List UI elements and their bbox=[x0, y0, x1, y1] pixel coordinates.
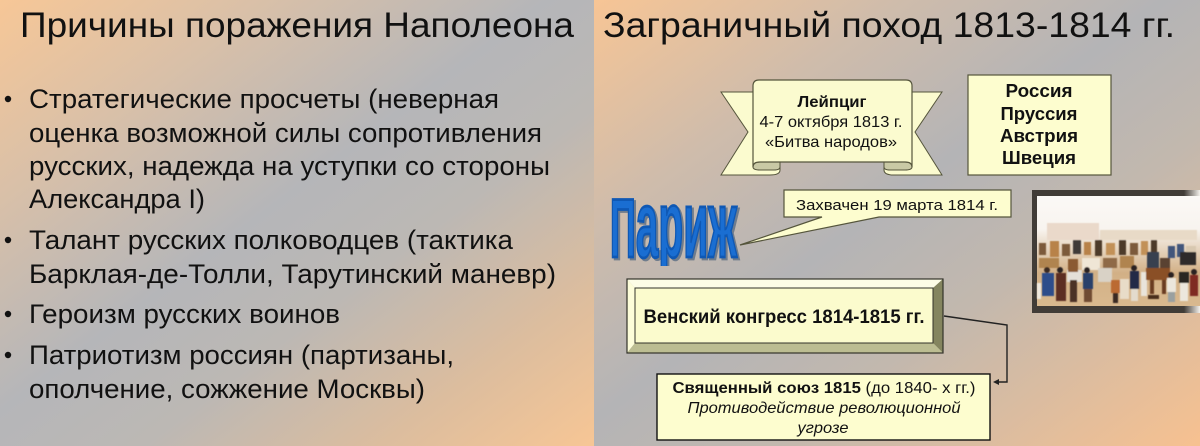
box: Holy Alliance bbox=[657, 374, 990, 440]
banner: Leipzig bbox=[721, 80, 942, 175]
panel: right background bbox=[594, 0, 1200, 446]
panel: left background bbox=[0, 0, 594, 446]
box: Congress of Vienna: Венский конгресс 1814-1815 гг. bbox=[644, 307, 924, 328]
wordart: Paris: Париж bbox=[612, 174, 740, 279]
box: Congress of Vienna bbox=[627, 279, 943, 353]
bullet item: patriotism: ополчение, сожжение Москвы) bbox=[29, 374, 425, 404]
bullet item: strategic miscalculations: Стратегические просчеты (неверная bbox=[29, 84, 499, 114]
banner: Leipzig: «Битва народов» bbox=[765, 134, 897, 151]
bullet item: strategic miscalculations: оценка возможной силы сопротивления bbox=[29, 118, 542, 148]
box: Holy Alliance: угрозе bbox=[796, 420, 849, 437]
wordart: Paris bbox=[612, 198, 740, 266]
image: entry of allied troops into Paris bbox=[1032, 190, 1200, 313]
bullet item: heroism: Героизм русских воинов bbox=[29, 299, 340, 329]
bullet item: patriotism: Патриотизм россиян (партизаны, bbox=[29, 340, 454, 370]
callout: captured March 19 1814: Захвачен 19 марта 1814 г. bbox=[796, 197, 998, 214]
box: allied countries: Австрия bbox=[1000, 126, 1078, 146]
bullet item: talent of commanders bbox=[5, 225, 556, 289]
bullet item: talent of commanders: Талант русских полководцев (тактика bbox=[29, 225, 514, 255]
title: foreign campaign: Заграничный поход 1813-1814 гг. bbox=[603, 6, 1175, 45]
callout: captured March 19 1814 bbox=[740, 190, 1011, 245]
bullet item: patriotism bbox=[5, 340, 454, 404]
banner: Leipzig: 4-7 октября 1813 г. bbox=[760, 114, 902, 131]
box: allied countries: Пруссия bbox=[1000, 104, 1078, 124]
wordart: Paris: Париж bbox=[610, 172, 738, 277]
box: allied countries: Швеция bbox=[1002, 148, 1076, 168]
text block: causes list bbox=[5, 84, 556, 404]
bullet item: talent of commanders: Барклая-де-Толли, Тарутинский маневр) bbox=[29, 259, 556, 289]
bullet item: strategic miscalculations bbox=[5, 84, 550, 214]
bullet item: strategic miscalculations: русских, надежда на уступки со стороны bbox=[29, 151, 550, 181]
box: Holy Alliance: Противодействие революционной bbox=[688, 400, 961, 417]
box: Holy Alliance: Священный союз 1815 (до 1840- х гг.) bbox=[672, 380, 975, 397]
banner: Leipzig: Лейпциг bbox=[798, 94, 867, 111]
figures foreground bbox=[1042, 273, 1054, 296]
box: allied countries bbox=[968, 75, 1111, 175]
bullet item: strategic miscalculations: Александра I) bbox=[29, 184, 205, 214]
box: allied countries: Россия bbox=[1006, 81, 1072, 101]
title: causes of defeat: Причины поражения Наполеона bbox=[20, 6, 575, 45]
arrow: congress to holy alliance bbox=[944, 316, 1007, 385]
